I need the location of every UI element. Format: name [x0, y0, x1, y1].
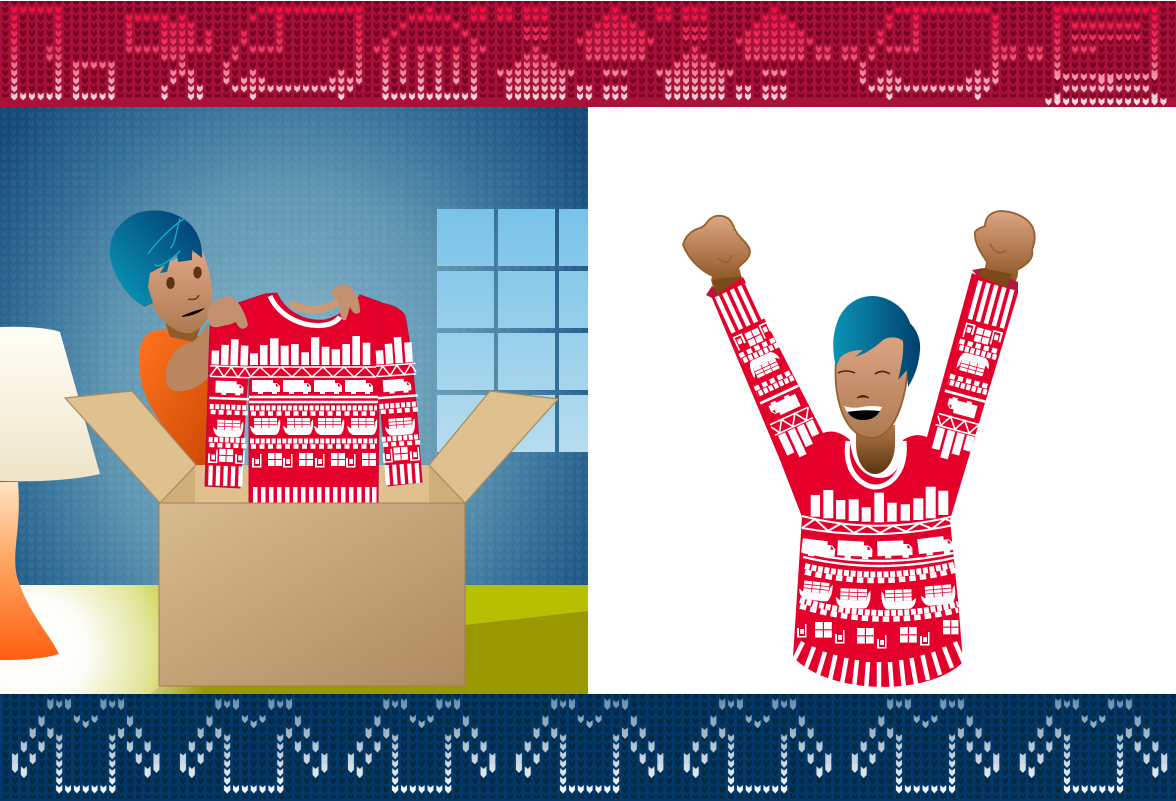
ships — [250, 418, 377, 435]
thumb lines — [718, 244, 1006, 262]
white collar ring — [847, 441, 904, 487]
trucks — [252, 380, 373, 394]
stripes — [249, 397, 378, 402]
windows — [815, 620, 958, 644]
panel: cheering person — [683, 211, 1035, 692]
floor — [0, 585, 588, 694]
ear — [128, 275, 158, 311]
left sleeve pattern — [206, 338, 251, 487]
window — [437, 209, 588, 452]
hands holding sweater — [207, 285, 360, 329]
wall knit texture — [0, 107, 588, 587]
wall — [0, 107, 588, 587]
lamp — [0, 327, 100, 660]
windows and forklifts — [252, 453, 376, 468]
sweater body and arms — [712, 273, 1018, 687]
neck — [856, 425, 895, 474]
torso — [226, 293, 380, 504]
bottom knit band with sweater motif — [0, 692, 1176, 801]
ships — [798, 580, 956, 610]
left sleeve — [205, 306, 250, 488]
nose — [857, 396, 869, 398]
hair highlights — [148, 218, 185, 266]
scallop drops — [251, 414, 377, 446]
trucks — [801, 535, 954, 560]
sweater held up — [205, 293, 424, 504]
right arm pattern — [928, 279, 1016, 465]
left fist — [683, 216, 750, 292]
triangle band — [802, 515, 958, 534]
hair — [110, 210, 202, 307]
closed eyes — [838, 371, 890, 374]
wrists — [712, 268, 1012, 297]
left arm pattern — [712, 281, 826, 463]
eyes — [166, 266, 202, 289]
top knit band with red pattern — [0, 0, 1176, 107]
head face — [836, 331, 908, 438]
smiling mouth — [844, 406, 882, 420]
forearm — [166, 322, 212, 391]
hem ribbing — [253, 487, 376, 503]
right sleeve pattern — [374, 336, 424, 485]
face — [148, 250, 213, 333]
torso: orange shirt — [139, 330, 225, 470]
scallops — [250, 408, 377, 441]
panel: room scene — [0, 107, 588, 694]
person behind sweater — [110, 210, 225, 470]
box flaps — [65, 391, 558, 503]
skyline bars — [811, 487, 948, 522]
inner collar — [288, 298, 342, 314]
right sleeve — [365, 300, 422, 486]
right fist — [975, 211, 1035, 292]
scallop drops — [800, 570, 958, 619]
fan ribbing — [794, 642, 964, 692]
sleeve cuffs — [706, 268, 1018, 300]
skyline bars — [250, 336, 370, 365]
forklifts — [797, 624, 930, 648]
hair — [833, 296, 920, 387]
box interior back — [160, 465, 465, 503]
cardboard box front — [159, 503, 465, 686]
nose — [188, 295, 199, 300]
triangle band — [249, 367, 376, 377]
mouth — [182, 308, 205, 317]
neck — [165, 322, 200, 342]
scallop rows — [800, 564, 958, 613]
curved stripes — [803, 552, 958, 566]
collar stripe — [270, 296, 340, 326]
